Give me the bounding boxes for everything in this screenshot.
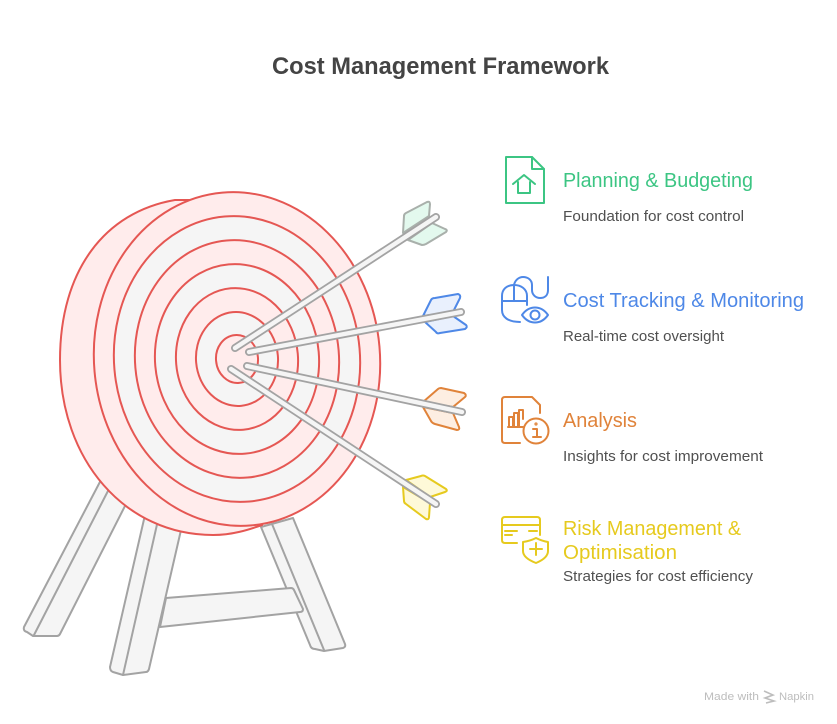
heading: Planning & Budgeting xyxy=(563,170,753,192)
item: Cost Tracking & Monitoring xyxy=(502,277,804,345)
stand: right leg xyxy=(261,518,345,651)
stand: middle leg xyxy=(110,515,181,675)
heading: Risk Management & xyxy=(563,518,742,540)
item: Planning & Budgeting xyxy=(506,157,753,225)
board: concentric rings xyxy=(80,180,394,538)
icon: mouse and eye xyxy=(502,277,548,322)
description: Strategies for cost efficiency xyxy=(563,569,754,585)
arrow: green xyxy=(235,202,447,348)
icon: Napkin logo xyxy=(764,691,774,703)
watermark: Made with xyxy=(704,691,759,703)
item: Analysis xyxy=(502,397,763,465)
heading: Analysis xyxy=(563,410,637,432)
icon: document with house xyxy=(506,157,544,203)
arrow: orange xyxy=(247,366,466,430)
icon: chart document with info xyxy=(502,397,548,444)
arrow: yellow xyxy=(231,369,447,519)
heading xyxy=(563,518,742,564)
description: Foundation for cost control xyxy=(563,209,744,225)
heading: Optimisation xyxy=(563,542,677,564)
stand: left leg xyxy=(24,478,127,636)
board: back edge xyxy=(60,200,300,535)
heading: Cost Tracking & Monitoring xyxy=(563,290,804,312)
target stand xyxy=(24,478,345,675)
stand: crossbar xyxy=(160,588,303,627)
description: Real-time cost oversight xyxy=(563,329,724,345)
title: Cost Management Framework xyxy=(272,53,610,80)
watermark xyxy=(704,691,814,703)
arrow: blue xyxy=(249,294,467,352)
icon: card with shield xyxy=(502,517,548,563)
target board xyxy=(60,180,394,538)
description: Insights for cost improvement xyxy=(563,449,763,465)
item: Risk Management & Optimisation xyxy=(502,517,754,585)
watermark: Napkin xyxy=(779,691,814,703)
